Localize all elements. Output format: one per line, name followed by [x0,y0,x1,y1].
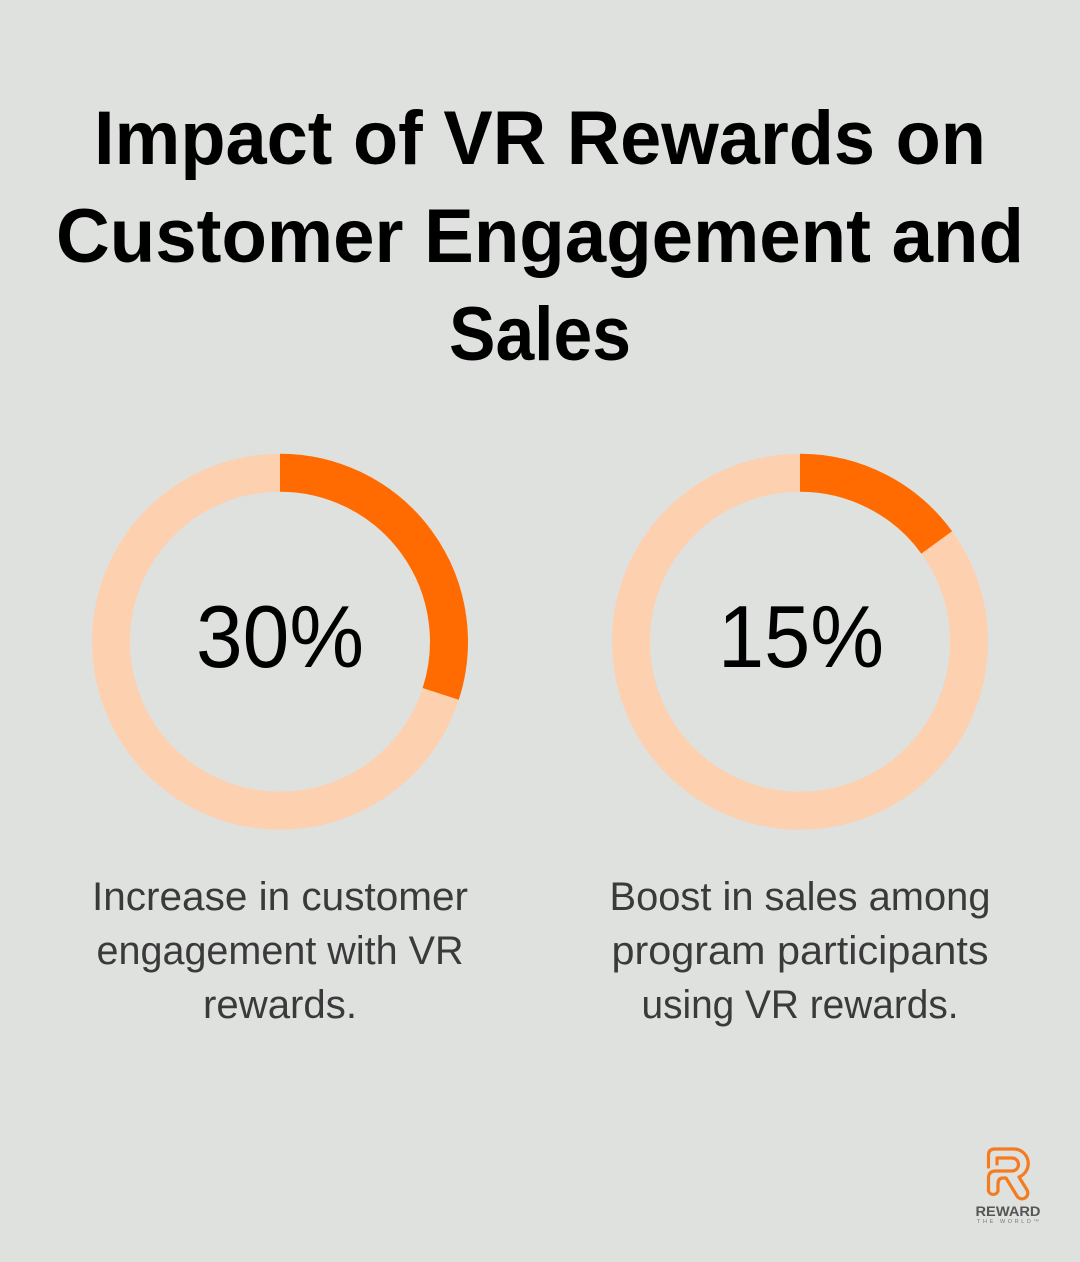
icon: R mark [988,1149,1028,1199]
tagline: THE WORLD™ [977,1219,1039,1225]
title [56,96,1024,377]
panel: 15% sales boost [610,473,990,1027]
donut chart: 30% [111,473,449,811]
description: sales boost: Boost in sales among [610,875,990,919]
title: Impact of VR Rewards on [94,96,986,181]
description: customer engagement [92,875,468,1027]
description: sales boost: program participants [612,929,988,973]
description: sales boost [610,875,990,1027]
value: 30%: 30% [196,587,364,686]
description: sales boost: using VR rewards. [642,983,958,1027]
donut chart: 15% [631,473,969,811]
wordmark: REWARD [976,1204,1041,1219]
description: customer engagement: Increase in customer [92,875,468,919]
title: Sales [449,292,631,377]
description: customer engagement: engagement with VR [96,929,464,973]
logo: Reward the World [976,1149,1041,1225]
description: customer engagement: rewards. [203,983,357,1027]
title: Customer Engagement and [56,194,1024,279]
panel: 30% customer engagement [92,473,468,1027]
value: 15%: 15% [718,587,884,686]
